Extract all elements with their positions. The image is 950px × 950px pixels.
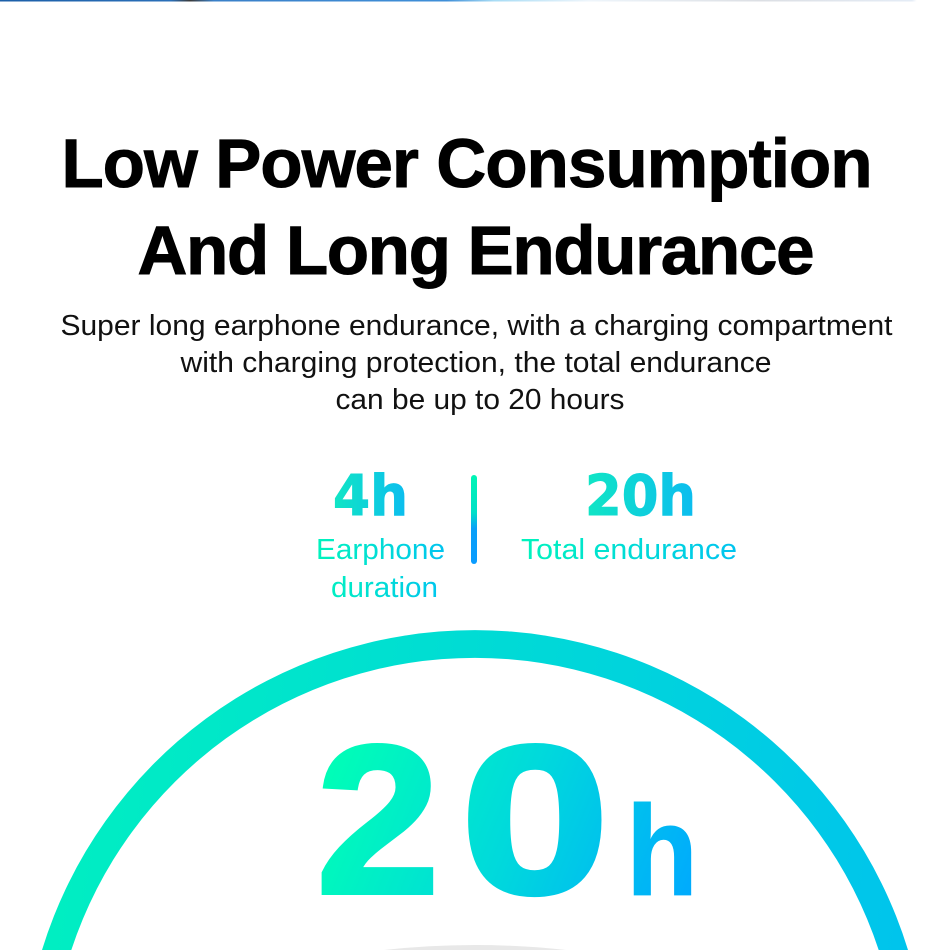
big 20h figure: h [626,780,698,923]
stat: earphone duration: Earphone [316,534,445,566]
description text: with charging protection, the total endurance [179,347,772,379]
stat: total endurance: Total endurance [521,534,737,566]
stat: earphone duration: duration [331,572,438,604]
description text [60,310,892,416]
battery ring arc [42,630,908,950]
stat: earphone duration: 4h [333,464,408,529]
top edge image strip [0,0,950,2]
grey product edge [384,945,566,950]
stat: total endurance [521,464,737,566]
title: Low Power Consumption [62,125,872,202]
description text: Super long earphone endurance, with a charging compartment [60,310,892,342]
big 20h figure: 0 [460,701,610,938]
title: And Long Endurance [138,212,814,289]
description text: can be up to 20 hours [336,384,624,416]
big 20h figure [316,701,698,938]
big 20h figure: 2 [316,701,440,938]
gradient divider [471,475,477,564]
stat: total endurance: 20h [585,464,696,529]
stat: earphone duration [316,464,445,604]
title [62,125,872,289]
